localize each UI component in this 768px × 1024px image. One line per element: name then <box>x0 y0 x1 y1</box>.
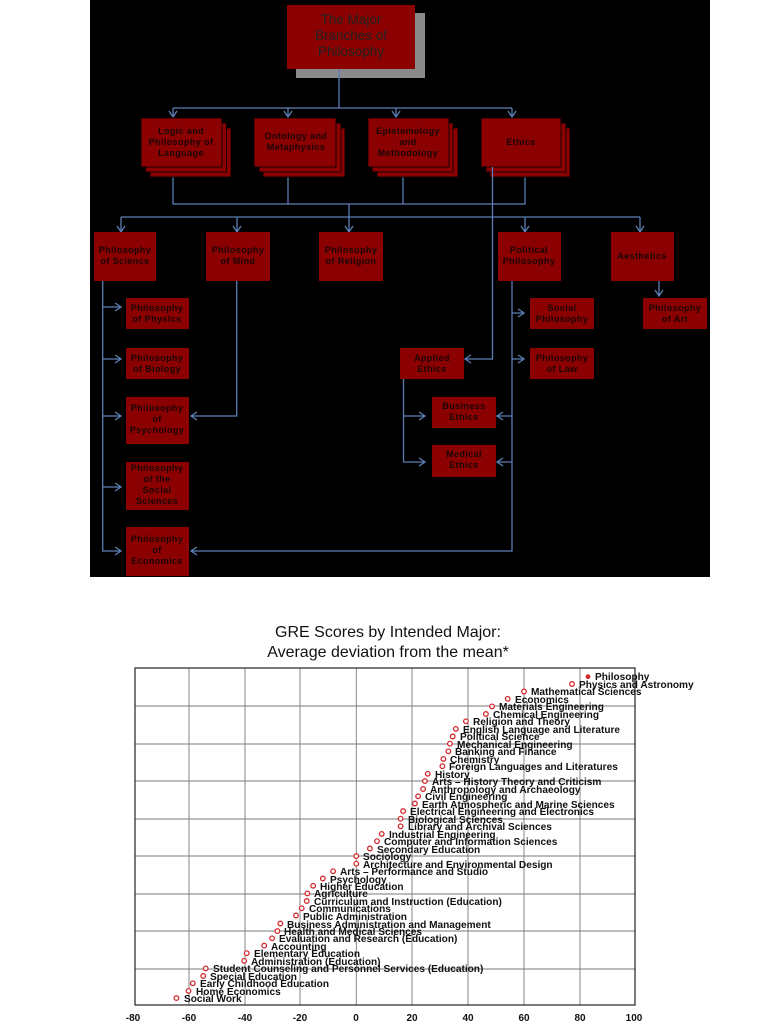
ethics sub-boxes: Applied <box>414 353 450 363</box>
science sub-boxes: Social <box>143 485 171 495</box>
science sub-boxes: of <box>152 414 162 424</box>
data points and labels: Accounting <box>271 942 327 953</box>
data points and labels: Religion and Theory <box>473 717 570 728</box>
data points and labels: Philosophy <box>595 672 650 683</box>
ethics sub-boxes: Ethics <box>449 412 479 422</box>
data points and labels: History <box>435 770 470 781</box>
data points and labels: Computer and Information Sciences <box>384 837 558 848</box>
political and aesthetics sub-boxes: of Law <box>547 364 578 374</box>
ethics sub-boxes: Business <box>442 401 486 411</box>
science sub-boxes: of Biology <box>133 364 181 374</box>
axis tick labels: 0 <box>353 1013 359 1024</box>
box: Ethics: Ethics <box>506 137 536 147</box>
data points and labels: Elementary Education <box>254 949 360 960</box>
box: Epistemology and Methodology <box>368 118 458 177</box>
data points and labels: Secondary Education <box>377 845 480 856</box>
box: Epistemology and Methodology: Methodology <box>378 148 438 158</box>
science sub-boxes: Philosophy <box>131 534 183 544</box>
data points and labels: Foreign Languages and Literatures <box>449 762 618 773</box>
level 3 boxes: Philosophy <box>212 245 264 255</box>
data points and labels: Administration (Education) <box>251 957 381 968</box>
data points and labels: Evaluation and Research (Education) <box>279 934 457 945</box>
axis tick labels: 80 <box>574 1013 586 1024</box>
axis tick labels: 60 <box>518 1013 530 1024</box>
data points and labels: Special Education <box>210 972 297 983</box>
box: Logic and Philosophy of Language: Logic and <box>158 126 204 136</box>
title box: The Major <box>321 12 382 27</box>
science sub-boxes: Philosophy <box>131 303 183 313</box>
axis tick labels: 40 <box>462 1013 474 1024</box>
axis tick labels: 100 <box>626 1013 643 1024</box>
science sub-boxes: Economics <box>131 556 183 566</box>
data points and labels: Student Counseling and Personnel Services (Education) <box>213 964 483 975</box>
science sub-boxes: Philosophy <box>131 403 183 413</box>
level 3 boxes: Philosophy <box>503 256 555 266</box>
box: Logic and Philosophy of Language: Philosophy of <box>149 137 214 147</box>
level 3 boxes: Political <box>510 245 548 255</box>
data points and labels: Mechanical Engineering <box>457 740 573 751</box>
ethics sub-boxes: Ethics <box>417 364 447 374</box>
chart title: Average deviation from the mean* <box>267 644 509 661</box>
science sub-boxes: of Physics <box>132 314 182 324</box>
box: Logic and Philosophy of Language <box>141 118 231 177</box>
data points and labels: Electrical Engineering and Electronics <box>410 807 594 818</box>
level 3 boxes: Aesthetics <box>617 251 667 261</box>
data points and labels: Early Childhood Education <box>200 979 329 990</box>
connectors lower <box>103 167 663 555</box>
data points and labels: Industrial Engineering <box>389 830 496 841</box>
chart title: GRE Scores by Intended Major: <box>275 624 501 641</box>
axis tick labels: -80 <box>126 1013 141 1024</box>
axis tick labels <box>126 1013 643 1024</box>
data points and labels: Economics <box>515 695 569 706</box>
box: Logic and Philosophy of Language: Language <box>158 148 204 158</box>
science sub-boxes: Philosophy <box>131 353 183 363</box>
data points and labels: Civil Engineering <box>425 792 507 803</box>
data points and labels: Home Economics <box>196 987 281 998</box>
data points and labels: Arts – Performance and Studio <box>340 867 488 878</box>
data points and labels: English Language and Literature <box>463 725 620 736</box>
box: Ontology and Metaphysics: Metaphysics <box>267 142 325 152</box>
data points and labels: Sociology <box>363 852 412 863</box>
data points and labels: Psychology <box>330 875 387 886</box>
science sub-boxes: Sciences <box>136 496 178 506</box>
science sub-boxes: Philosophy <box>131 463 183 473</box>
data points and labels: Anthropology and Archaeology <box>430 785 581 796</box>
science sub-boxes: of the <box>144 474 170 484</box>
data points and labels: Business Administration and Management <box>287 920 491 931</box>
data points and labels: Political Science <box>460 732 540 743</box>
box: Epistemology and Methodology: Epistemology <box>376 126 440 136</box>
data points and labels: Biological Sciences <box>408 815 503 826</box>
data points and labels: Curriculum and Instruction (Education) <box>314 897 502 908</box>
political and aesthetics sub-boxes: Social <box>548 303 576 313</box>
ethics sub-boxes: Medical <box>446 449 482 459</box>
data points and labels: Materials Engineering <box>499 702 604 713</box>
political and aesthetics sub-boxes: Philosophy <box>649 303 701 313</box>
title box: Branches of <box>315 28 387 43</box>
data points and labels: Banking and Finance <box>455 747 557 758</box>
data points and labels: Architecture and Environmental Design <box>363 860 553 871</box>
level 3 boxes: of Religion <box>326 256 376 266</box>
political and aesthetics sub-boxes: Philosophy <box>536 314 588 324</box>
data points and labels: Communications <box>309 904 391 915</box>
data points and labels: Chemical Engineering <box>493 710 599 721</box>
ethics sub-boxes <box>400 348 496 477</box>
scatter chart <box>126 668 694 1024</box>
data points and labels: Public Administration <box>303 912 407 923</box>
level 3 boxes: Philosophy <box>325 245 377 255</box>
data points and labels: Physics and Astronomy <box>579 680 694 691</box>
axis tick labels: 20 <box>406 1013 418 1024</box>
title box: Philosophy <box>318 44 384 59</box>
political and aesthetics sub-boxes <box>530 298 707 379</box>
title box <box>287 5 425 78</box>
ethics sub-boxes: Ethics <box>449 460 479 470</box>
data points and labels: Higher Education <box>320 882 404 893</box>
data points and labels: Agriculture <box>314 889 368 900</box>
data points and labels: Library and Archival Sciences <box>408 822 552 833</box>
science sub-boxes <box>126 298 189 576</box>
axis tick labels: -20 <box>293 1013 308 1024</box>
axis tick labels: -60 <box>182 1013 197 1024</box>
box: Ontology and Metaphysics: Ontology and <box>265 131 327 141</box>
box: Epistemology and Methodology: and <box>399 137 417 147</box>
connectors top <box>117 69 644 232</box>
data points and labels: Chemistry <box>450 755 500 766</box>
science sub-boxes: Psychology <box>130 425 184 435</box>
panel: philosophy branches diagram <box>90 0 710 577</box>
level 3 boxes: of Science <box>100 256 150 266</box>
chart title <box>267 624 509 661</box>
data points and labels <box>174 672 694 1005</box>
data points and labels: Social Work <box>184 994 242 1005</box>
box: Ethics <box>481 118 570 177</box>
level 3 boxes <box>94 232 674 281</box>
level 3 boxes: Philosophy <box>99 245 151 255</box>
science sub-boxes: of <box>152 545 162 555</box>
box: Ontology and Metaphysics <box>254 118 345 177</box>
data points and labels: Health and Medical Sciences <box>284 927 422 938</box>
data points and labels: Mathematical Sciences <box>531 687 642 698</box>
level 3 boxes: of Mind <box>221 256 255 266</box>
data points and labels: Earth Atmospheric and Marine Sciences <box>422 800 615 811</box>
political and aesthetics sub-boxes: of Art <box>662 314 688 324</box>
axis tick labels: -40 <box>238 1013 253 1024</box>
data points and labels: Arts – History Theory and Criticism <box>432 777 601 788</box>
political and aesthetics sub-boxes: Philosophy <box>536 353 588 363</box>
